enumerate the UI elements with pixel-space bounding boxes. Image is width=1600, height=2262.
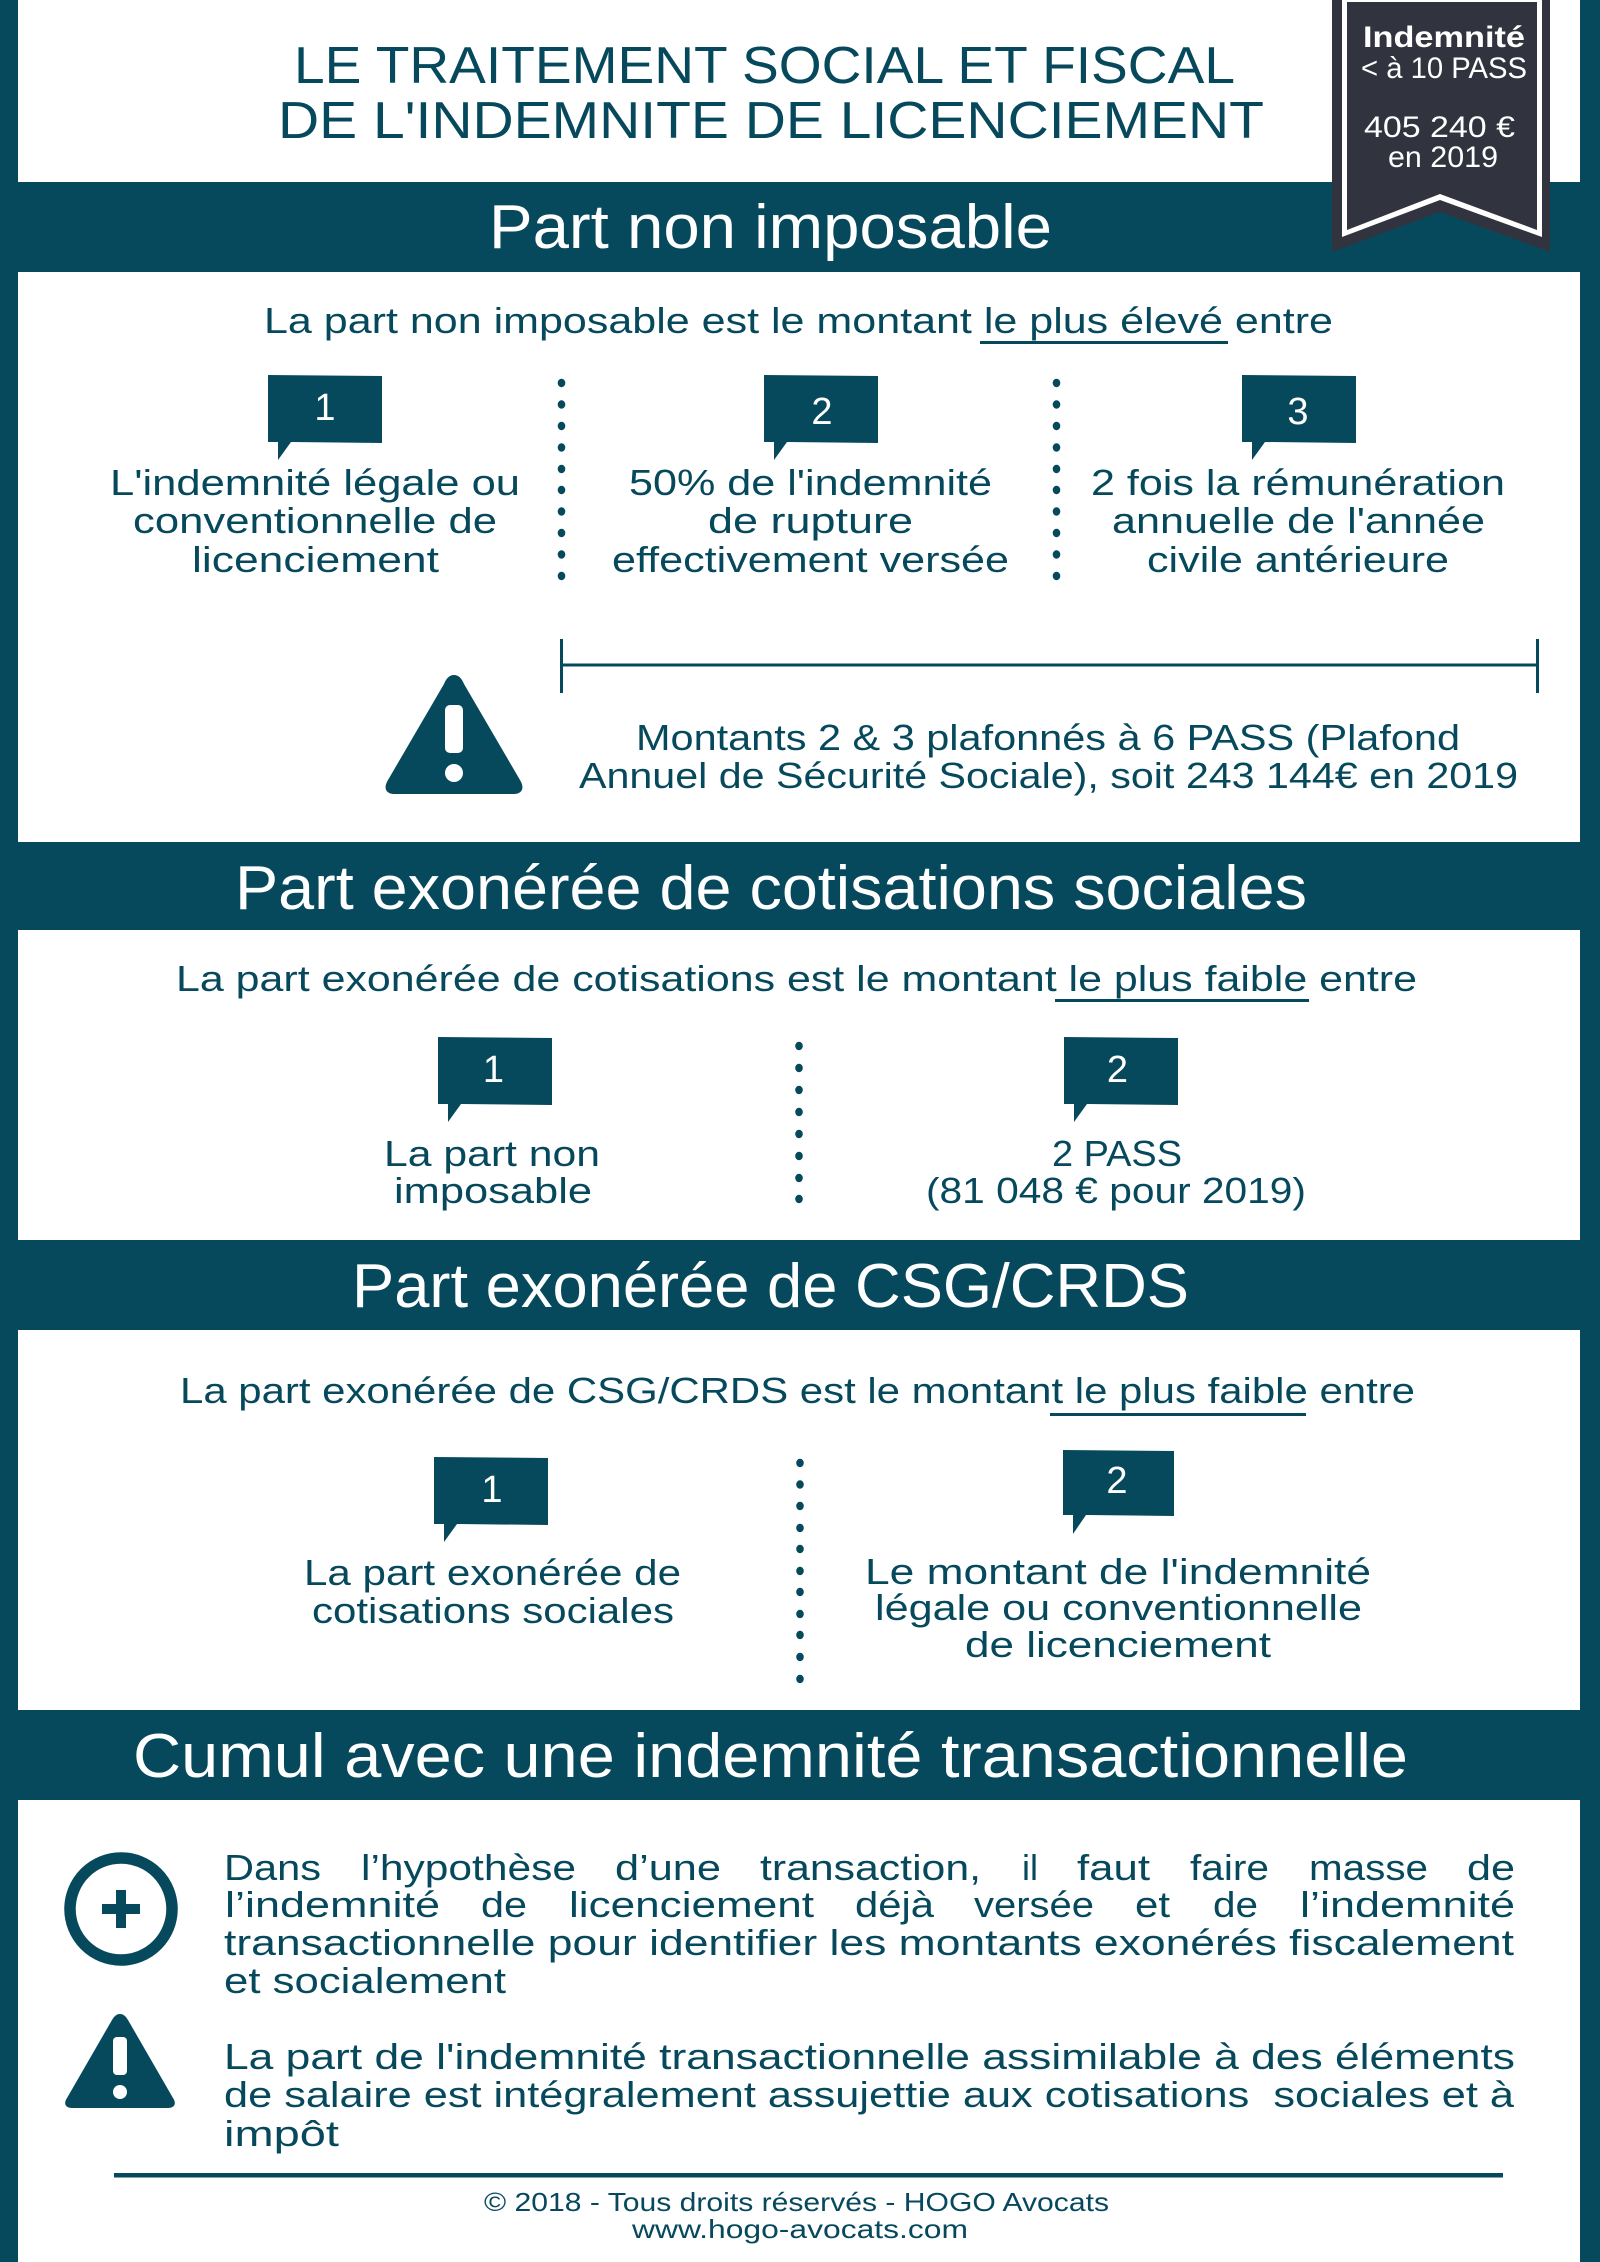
- dotted separator 1: [558, 379, 565, 580]
- item 1: indemnité légale: conventionnelle de: [133, 500, 497, 541]
- bubble 1: [434, 1457, 548, 1542]
- band: part non imposable: [0, 182, 1600, 272]
- lead text: CSG/CRDS: La part exonérée de CSG/CRDS est le montant le plus faible entre: [180, 1370, 1415, 1411]
- item: 2 PASS: 2 PASS: [1052, 1133, 1182, 1174]
- item: part exonérée de cotisations sociales: [304, 1457, 681, 1631]
- paragraph: transaction: faire: [1190, 1847, 1269, 1888]
- badge: indemnité inférieure à 10 PASS: < à 10 PASS: [1361, 52, 1527, 85]
- bubble 2: [1064, 1037, 1178, 1122]
- band: part exonérée de cotisations sociales: Part exonérée de cotisations sociales: [235, 854, 1307, 923]
- paragraph: transaction: l’indemnité: [1300, 1884, 1515, 1925]
- badge: indemnité inférieure à 10 PASS: [1332, 0, 1550, 252]
- item 3: 2 fois la rémunération: [1091, 375, 1505, 580]
- bubble 2: [1063, 1450, 1174, 1534]
- paragraph: transaction: versée: [974, 1884, 1094, 1925]
- bubble 2: 2: [1107, 1049, 1128, 1091]
- item: part exonérée de cotisations sociales: La part exonérée de: [304, 1552, 681, 1593]
- item: montant de l'indemnité légale: de licenciement: [965, 1624, 1271, 1665]
- footer: [484, 2187, 1109, 2244]
- item: 2 PASS: [926, 1037, 1306, 1211]
- bubble 1: [438, 1037, 552, 1122]
- item: 2 PASS: (81 048 € pour 2019): [926, 1170, 1306, 1211]
- paragraph: transaction: déjà: [855, 1884, 935, 1925]
- band: part exonérée de cotisations sociales: [0, 842, 1600, 930]
- band: part exonérée de CSG/CRDS: [0, 1240, 1600, 1330]
- paragraph: transaction: Dans: [224, 1847, 321, 1888]
- footer: www.hogo-avocats.com: [631, 2214, 968, 2244]
- bubble 2: [764, 375, 878, 460]
- band: part non imposable: Part non imposable: [489, 193, 1052, 262]
- paragraph: transaction: de: [1213, 1884, 1258, 1925]
- item 2: 50% de l'indemnité: [612, 375, 1009, 580]
- paragraph: transaction: licenciement: [569, 1884, 814, 1925]
- icon: plus: [70, 1858, 172, 1960]
- band: part exonérée de CSG/CRDS: Part exonérée de CSG/CRDS: [352, 1252, 1189, 1321]
- note: plafond 6 PASS: [579, 717, 1518, 796]
- item 1: indemnité légale: [110, 375, 520, 580]
- bubble 3: [1242, 375, 1356, 460]
- lead text: cotisations: La part exonérée de cotisations est le montant le plus faible entre: [176, 958, 1417, 999]
- title: LE TRAITEMENT SOCIAL ET FISCAL: [294, 37, 1235, 95]
- bubble 3: 3: [1287, 391, 1309, 433]
- item 3: 2 fois la rémunération: civile antérieure: [1147, 539, 1449, 580]
- paragraph: transaction: faut: [1077, 1847, 1150, 1888]
- paragraph: part assimilable: La part de l'indemnité transactionnelle assimilable à des éléments: [224, 2036, 1515, 2077]
- paragraph: transaction: transactionnelle pour identifier les montants exonérés fiscalement: [224, 1922, 1514, 1963]
- item: montant de l'indemnité légale: légale ou conventionnelle: [875, 1587, 1362, 1628]
- paragraph: transaction: l’indemnité: [225, 1884, 440, 1925]
- badge: indemnité inférieure à 10 PASS: en 2019: [1388, 141, 1498, 174]
- title: [278, 37, 1264, 150]
- icon: warning small: [65, 2014, 175, 2108]
- bubble 2: 2: [811, 391, 833, 433]
- item: montant de l'indemnité légale: [865, 1450, 1371, 1665]
- paragraph: transaction: l’hypothèse: [361, 1847, 576, 1888]
- paragraph: transaction: transaction,: [760, 1847, 981, 1888]
- item 1: indemnité légale: L'indemnité légale ou: [110, 462, 520, 503]
- item: la part non imposable: imposable: [394, 1170, 592, 1211]
- item: part exonérée de cotisations sociales: cotisations sociales: [312, 1590, 674, 1631]
- paragraph: part assimilable: de salaire est intégralement assujettie aux cotisations sociales et à: [224, 2074, 1515, 2115]
- badge: indemnité inférieure à 10 PASS: 405 240 €: [1364, 111, 1515, 144]
- item 2: 50% de l'indemnité: effectivement versée: [612, 539, 1009, 580]
- paragraph: transaction: il: [1022, 1847, 1038, 1888]
- item 3: 2 fois la rémunération: annuelle de l'année: [1112, 500, 1485, 541]
- footer: © 2018 - Tous droits réservés - HOGO Avocats: [484, 2187, 1109, 2217]
- bubble 1: [268, 375, 382, 460]
- paragraph: transaction: et socialement: [224, 1960, 506, 2001]
- paragraph: transaction: de: [481, 1884, 527, 1925]
- item: la part non imposable: La part non: [384, 1133, 600, 1174]
- item 1: indemnité légale: licenciement: [192, 539, 439, 580]
- title: DE L'INDEMNITE DE LICENCIEMENT: [278, 92, 1264, 150]
- bubble 1: 1: [483, 1049, 504, 1091]
- lead text: part non imposable: La part non imposable est le montant le plus élevé entre: [264, 300, 1333, 341]
- paragraph: transaction: masse: [1309, 1847, 1428, 1888]
- dotted separator: [796, 1459, 804, 1683]
- paragraph: transaction: de: [1467, 1847, 1515, 1888]
- bubble 1: 1: [314, 387, 336, 429]
- paragraph: transaction: [224, 1847, 1515, 2001]
- band: cumul avec une indemnité transactionnelle: [0, 1710, 1600, 1800]
- icon: warning: [386, 675, 522, 794]
- bubble 1: 1: [481, 1469, 503, 1511]
- dotted separator: [795, 1042, 803, 1203]
- item 2: 50% de l'indemnité: 50% de l'indemnité: [629, 462, 992, 503]
- item: montant de l'indemnité légale: Le montant de l'indemnité: [865, 1551, 1371, 1592]
- dotted separator 2: [1053, 379, 1060, 580]
- item 3: 2 fois la rémunération: 2 fois la rémunération: [1091, 462, 1505, 503]
- paragraph: part assimilable: [224, 2036, 1515, 2154]
- paragraph: part assimilable: impôt: [224, 2113, 339, 2154]
- item 2: 50% de l'indemnité: de rupture: [708, 500, 913, 541]
- range bracket: [560, 639, 1539, 693]
- badge: indemnité inférieure à 10 PASS: Indemnité: [1363, 21, 1525, 54]
- note: plafond 6 PASS: Annuel de Sécurité Sociale), soit 243 144€ en 2019: [579, 755, 1518, 796]
- bubble 2: 2: [1106, 1460, 1128, 1502]
- item: la part non imposable: [384, 1037, 600, 1211]
- note: plafond 6 PASS: Montants 2 & 3 plafonnés à 6 PASS (Plafond: [636, 717, 1460, 758]
- band: cumul avec une indemnité transactionnelle: Cumul avec une indemnité transactionnelle: [133, 1722, 1408, 1791]
- paragraph: transaction: et: [1135, 1884, 1170, 1925]
- paragraph: transaction: d’une: [615, 1847, 721, 1888]
